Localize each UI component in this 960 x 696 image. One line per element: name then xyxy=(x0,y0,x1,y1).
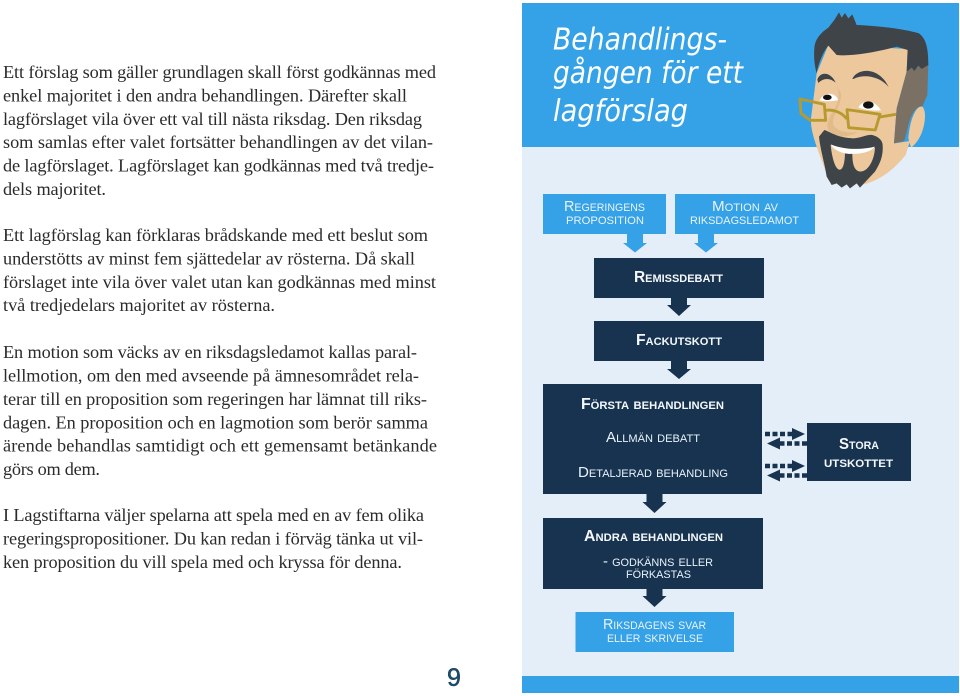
text block: paragraph 1: Ett förslag som gäller grundlagen skall först godkännas med xyxy=(3,62,436,82)
box: Andra behandlingen: Andra behandlingen xyxy=(584,528,723,545)
glasses xyxy=(800,99,896,130)
text block: paragraph 2: understötts av minst fem sjättedelar av rösterna. Då skall xyxy=(3,248,415,268)
text block: paragraph 3: En motion som väcks av en riksdagsledamot kallas paral- xyxy=(3,342,417,362)
text block: paragraph 1: de lagförslaget. Lagförslaget kan godkännas med två tredje- xyxy=(3,156,434,176)
title: Behandlings- xyxy=(553,22,727,58)
text block: paragraph 1: dels majoritet. xyxy=(3,179,106,199)
box: Första behandlingen xyxy=(543,384,762,494)
box: Fackutskott: Fackutskott xyxy=(636,332,722,349)
text block: paragraph 1 xyxy=(3,62,436,199)
box: Riksdagens svar eller skrivelse: Riksdagens svar xyxy=(603,616,706,633)
text block: paragraph 3: dagen. En proposition och en lagmotion som berör samma xyxy=(3,412,428,432)
box: Remissdebatt: Remissdebatt xyxy=(634,269,723,286)
text block: paragraph 1: som samlas efter valet fortsätter behandlingen av det vilan- xyxy=(3,132,433,152)
top hair xyxy=(814,12,928,73)
eyebrows xyxy=(817,71,889,87)
arrow: remissdebatt to fackutskott xyxy=(667,298,691,316)
box: Remissdebatt xyxy=(594,258,764,298)
box: Första behandlingen: Detaljerad behandling xyxy=(578,464,728,481)
box: Riksdagens svar eller skrivelse xyxy=(576,612,734,652)
icon: bearded man with glasses xyxy=(800,12,928,188)
chin patches xyxy=(831,145,875,172)
text block: paragraph 3: ärende behandlas samtidigt och ett gemensamt betänkande xyxy=(3,436,437,456)
ear xyxy=(908,107,925,148)
title: gången för ett xyxy=(553,56,744,91)
face xyxy=(811,45,910,185)
box: Motion av riksdagsledamot: riksdagsledamot xyxy=(690,211,799,228)
arrow: fackutskott to första behandlingen xyxy=(667,361,691,379)
text block: paragraph 1: enkel majoritet i den andra behandlingen. Därefter skall xyxy=(3,85,407,105)
text block: paragraph 2: Ett lagförslag kan förklaras brådskande med ett beslut som xyxy=(3,225,428,245)
text block: paragraph 1: lagförslaget vila över ett val till nästa riksdag. Den riksdag xyxy=(3,109,422,129)
box: Stora utskottet xyxy=(807,423,911,481)
text block: paragraph 3: terar till en proposition som regeringen har lämnat till riks- xyxy=(3,389,427,409)
arrow: proposition to remissdebatt xyxy=(623,234,647,252)
text block: paragraph 2 xyxy=(3,225,436,315)
text block: paragraph 4: regeringspropositioner. Du kan redan i förväg tänka ut vil- xyxy=(3,528,423,548)
box: Första behandlingen: Första behandlingen xyxy=(581,396,724,413)
text block: paragraph 4: I Lagstiftarna väljer spelarna att spela med en av fem olika xyxy=(3,505,424,525)
smile xyxy=(831,144,875,154)
text block: paragraph 2: två tredjedelars majoritet av rösterna. xyxy=(3,295,275,315)
nose shadow xyxy=(827,83,858,136)
title: lagförslag xyxy=(553,94,688,129)
box: Fackutskott xyxy=(594,321,764,361)
box: Regeringens proposition: proposition xyxy=(566,211,644,228)
box: Andra behandlingen: förkastas xyxy=(626,565,691,582)
box: Andra behandlingen xyxy=(543,518,763,589)
box: Andra behandlingen: - godkänns eller xyxy=(603,553,713,570)
box: Motion av riksdagsledamot xyxy=(675,194,815,234)
box: Riksdagens svar eller skrivelse: eller skrivelse xyxy=(607,629,703,646)
eyes xyxy=(820,94,881,111)
text block: paragraph 4: ken proposition du vill spela med och kryssa för denna. xyxy=(3,552,402,572)
text block: paragraph 3: lellmotion, om den med avseende på ämnesområdet rela- xyxy=(3,366,419,386)
box: Regeringens proposition xyxy=(543,194,666,234)
arrow: andra behandlingen to riksdagens svar xyxy=(642,589,666,607)
box: Regeringens proposition: Regeringens xyxy=(564,198,645,215)
panel: flowchart background xyxy=(522,3,959,693)
box: Första behandlingen: Allmän debatt xyxy=(606,429,700,446)
side hair xyxy=(894,63,928,143)
box: Stora utskottet: utskottet xyxy=(824,454,893,471)
arrows: dotted two-way links to stora utskottet xyxy=(765,428,807,482)
text block: paragraph 3: görs om dem. xyxy=(3,459,100,479)
page number: 9 xyxy=(447,664,461,692)
arrow: motion to remissdebatt xyxy=(694,234,718,252)
text block: paragraph 2: förslaget inte vila över valet utan kan godkännas med minst xyxy=(3,272,436,292)
text block: paragraph 3 xyxy=(3,342,437,479)
goatee xyxy=(819,130,883,188)
box: Motion av riksdagsledamot: Motion av xyxy=(712,198,779,215)
arrow: första to andra behandlingen xyxy=(642,494,666,513)
box: Stora utskottet: Stora xyxy=(839,436,879,453)
title xyxy=(553,22,744,129)
text block: paragraph 4 xyxy=(3,505,424,572)
